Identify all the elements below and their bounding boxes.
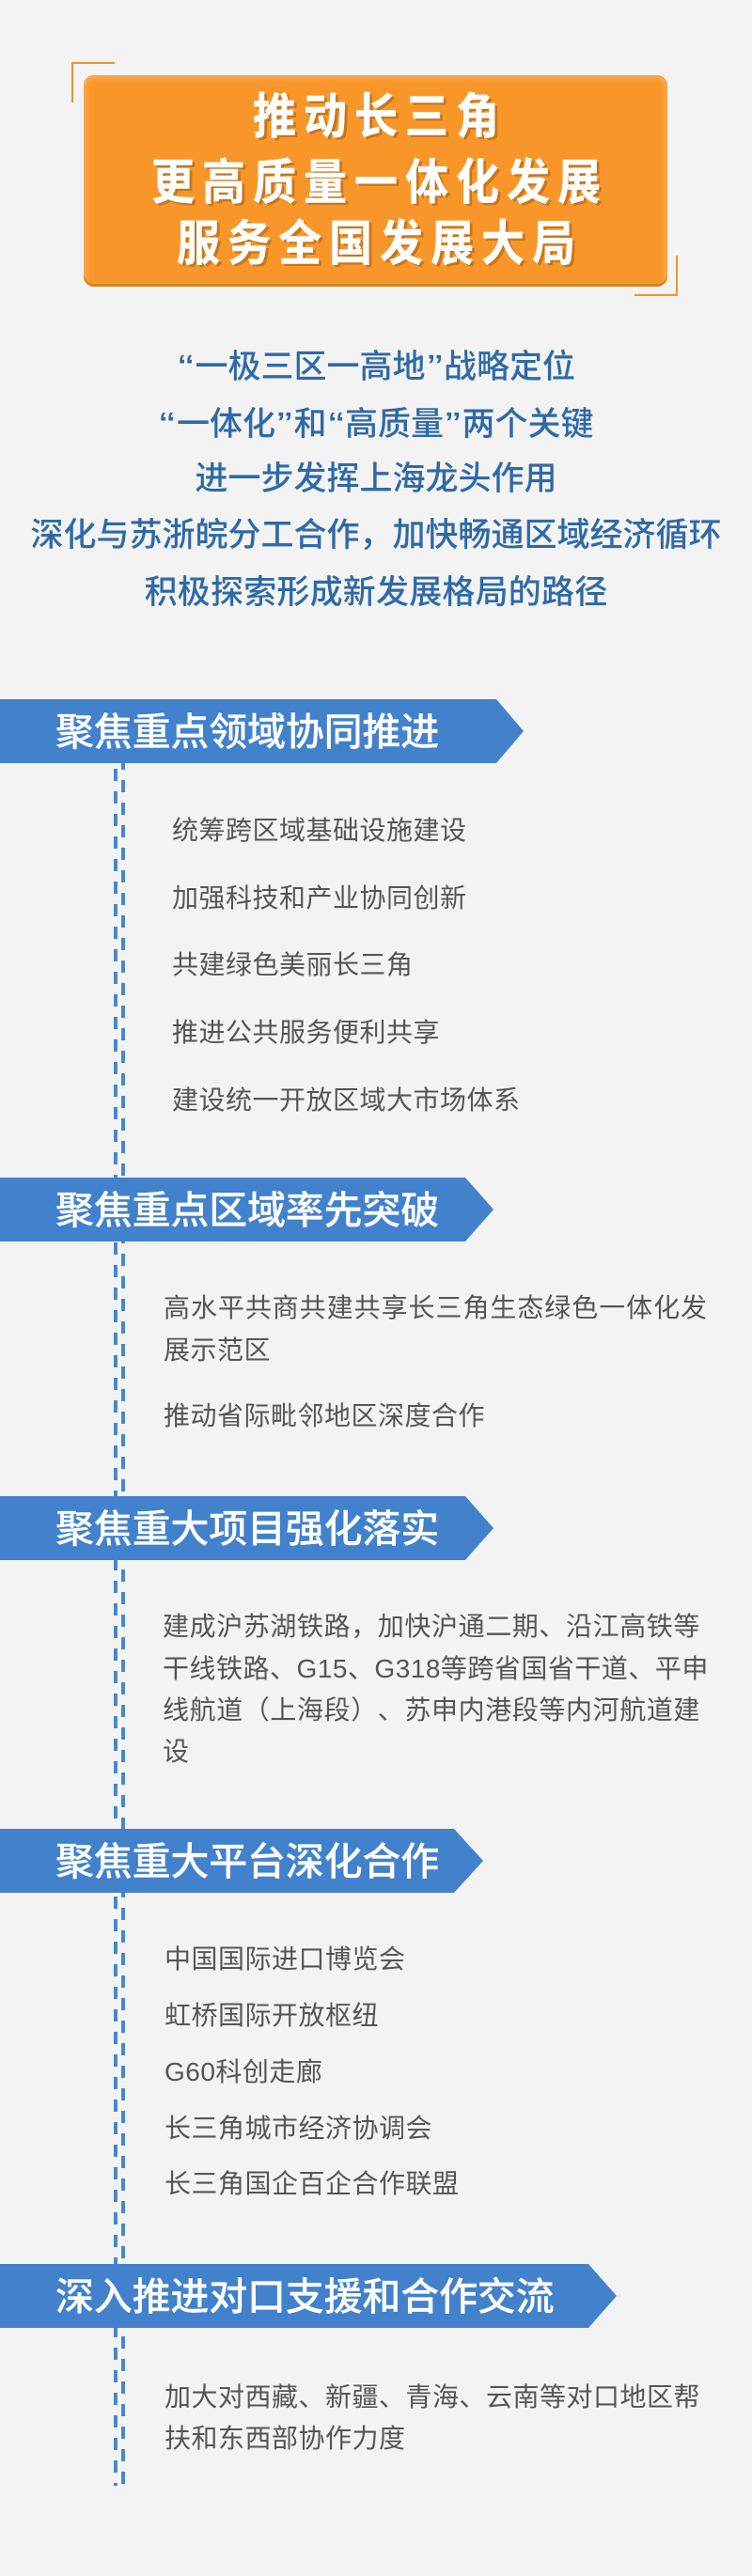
orange title card bbox=[84, 75, 667, 287]
item: 统筹跨区域基础设施建设 bbox=[172, 816, 467, 845]
intro line 2: “ bbox=[328, 406, 343, 445]
item: 建设统一开放区域大市场体系 bbox=[172, 1085, 521, 1115]
intro line 1: “ bbox=[179, 349, 194, 388]
banner 4 bbox=[0, 1829, 483, 1893]
banner 1 bbox=[0, 699, 524, 763]
banner 1: 聚焦重点领域协同推进 bbox=[55, 710, 439, 754]
intro line 4: 深化与苏浙皖分工合作，加快畅通区域经济循环 bbox=[30, 517, 722, 554]
item line 2: 干线铁路、G15、G318等跨省国省干道、平申 bbox=[163, 1654, 709, 1683]
item: 推动省际毗邻地区深度合作 bbox=[164, 1401, 485, 1430]
item: 加强科技和产业协同创新 bbox=[172, 883, 467, 913]
title line 2: 更高质量一体化发展 bbox=[151, 155, 608, 210]
item: G60科创走廊 bbox=[164, 2057, 322, 2086]
corner bracket bottom right bbox=[634, 256, 678, 296]
item: 中国国际进口博览会 bbox=[164, 1944, 406, 1974]
section 4: major platforms bbox=[0, 1829, 483, 2198]
timeline dashed line bbox=[114, 763, 125, 2486]
intro line 2: ” bbox=[277, 406, 292, 445]
banner 5: 深入推进对口支援和合作交流 bbox=[55, 2275, 554, 2318]
item line 2: 扶和东西部协作力度 bbox=[164, 2424, 406, 2453]
intro line 2: ” bbox=[446, 406, 461, 445]
banner 4: 聚焦重大平台深化合作 bbox=[55, 1840, 439, 1883]
banner 3: 聚焦重大项目强化落实 bbox=[55, 1507, 439, 1551]
item: 高水平共商共建共享长三角生态绿色一体化发 bbox=[164, 1293, 708, 1322]
corner bracket top left bbox=[71, 62, 115, 102]
item continuation: 展示范区 bbox=[164, 1335, 271, 1365]
intro line 2: 一体化 和 高质量 两个关键 bbox=[177, 406, 594, 443]
banner 2 bbox=[0, 1178, 494, 1241]
item line 3: 线航道（上海段）、苏申内港段等内河航道建 bbox=[163, 1695, 700, 1725]
section 1: key fields bbox=[0, 699, 524, 1115]
intro line 5: 积极探索形成新发展格局的路径 bbox=[145, 574, 607, 611]
title line 1: 推动长三角 bbox=[253, 89, 507, 144]
section 3: major projects bbox=[0, 1496, 709, 1766]
item line 1: 加大对西藏、新疆、青海、云南等对口地区帮 bbox=[164, 2382, 700, 2412]
title line 3: 服务全国发展大局 bbox=[177, 216, 583, 271]
item: 虹桥国际开放枢纽 bbox=[164, 2001, 379, 2030]
header: title card with corner brackets bbox=[71, 62, 678, 296]
banner 3 bbox=[0, 1496, 494, 1560]
intro line 3: 进一步发挥上海龙头作用 bbox=[195, 461, 556, 497]
banner 2: 聚焦重点区域率先突破 bbox=[55, 1189, 439, 1232]
banner 5 bbox=[0, 2264, 617, 2328]
section 5: paired support bbox=[0, 2264, 700, 2453]
section 2: key regions bbox=[0, 1178, 708, 1430]
item: 共建绿色美丽长三角 bbox=[172, 950, 414, 979]
intro line 1: ” bbox=[427, 349, 442, 388]
intro line 1: 一极三区一高地 战略定位 bbox=[195, 349, 575, 385]
item: 长三角城市经济协调会 bbox=[164, 2114, 432, 2143]
item line 4: 设 bbox=[163, 1737, 190, 1766]
item line 1: 建成沪苏湖铁路，加快沪通二期、沿江高铁等 bbox=[163, 1612, 700, 1641]
intro text block bbox=[30, 349, 722, 611]
item: 长三角国企百企合作联盟 bbox=[164, 2169, 460, 2198]
item: 推进公共服务便利共享 bbox=[172, 1018, 440, 1047]
intro line 2: “ bbox=[160, 406, 175, 445]
